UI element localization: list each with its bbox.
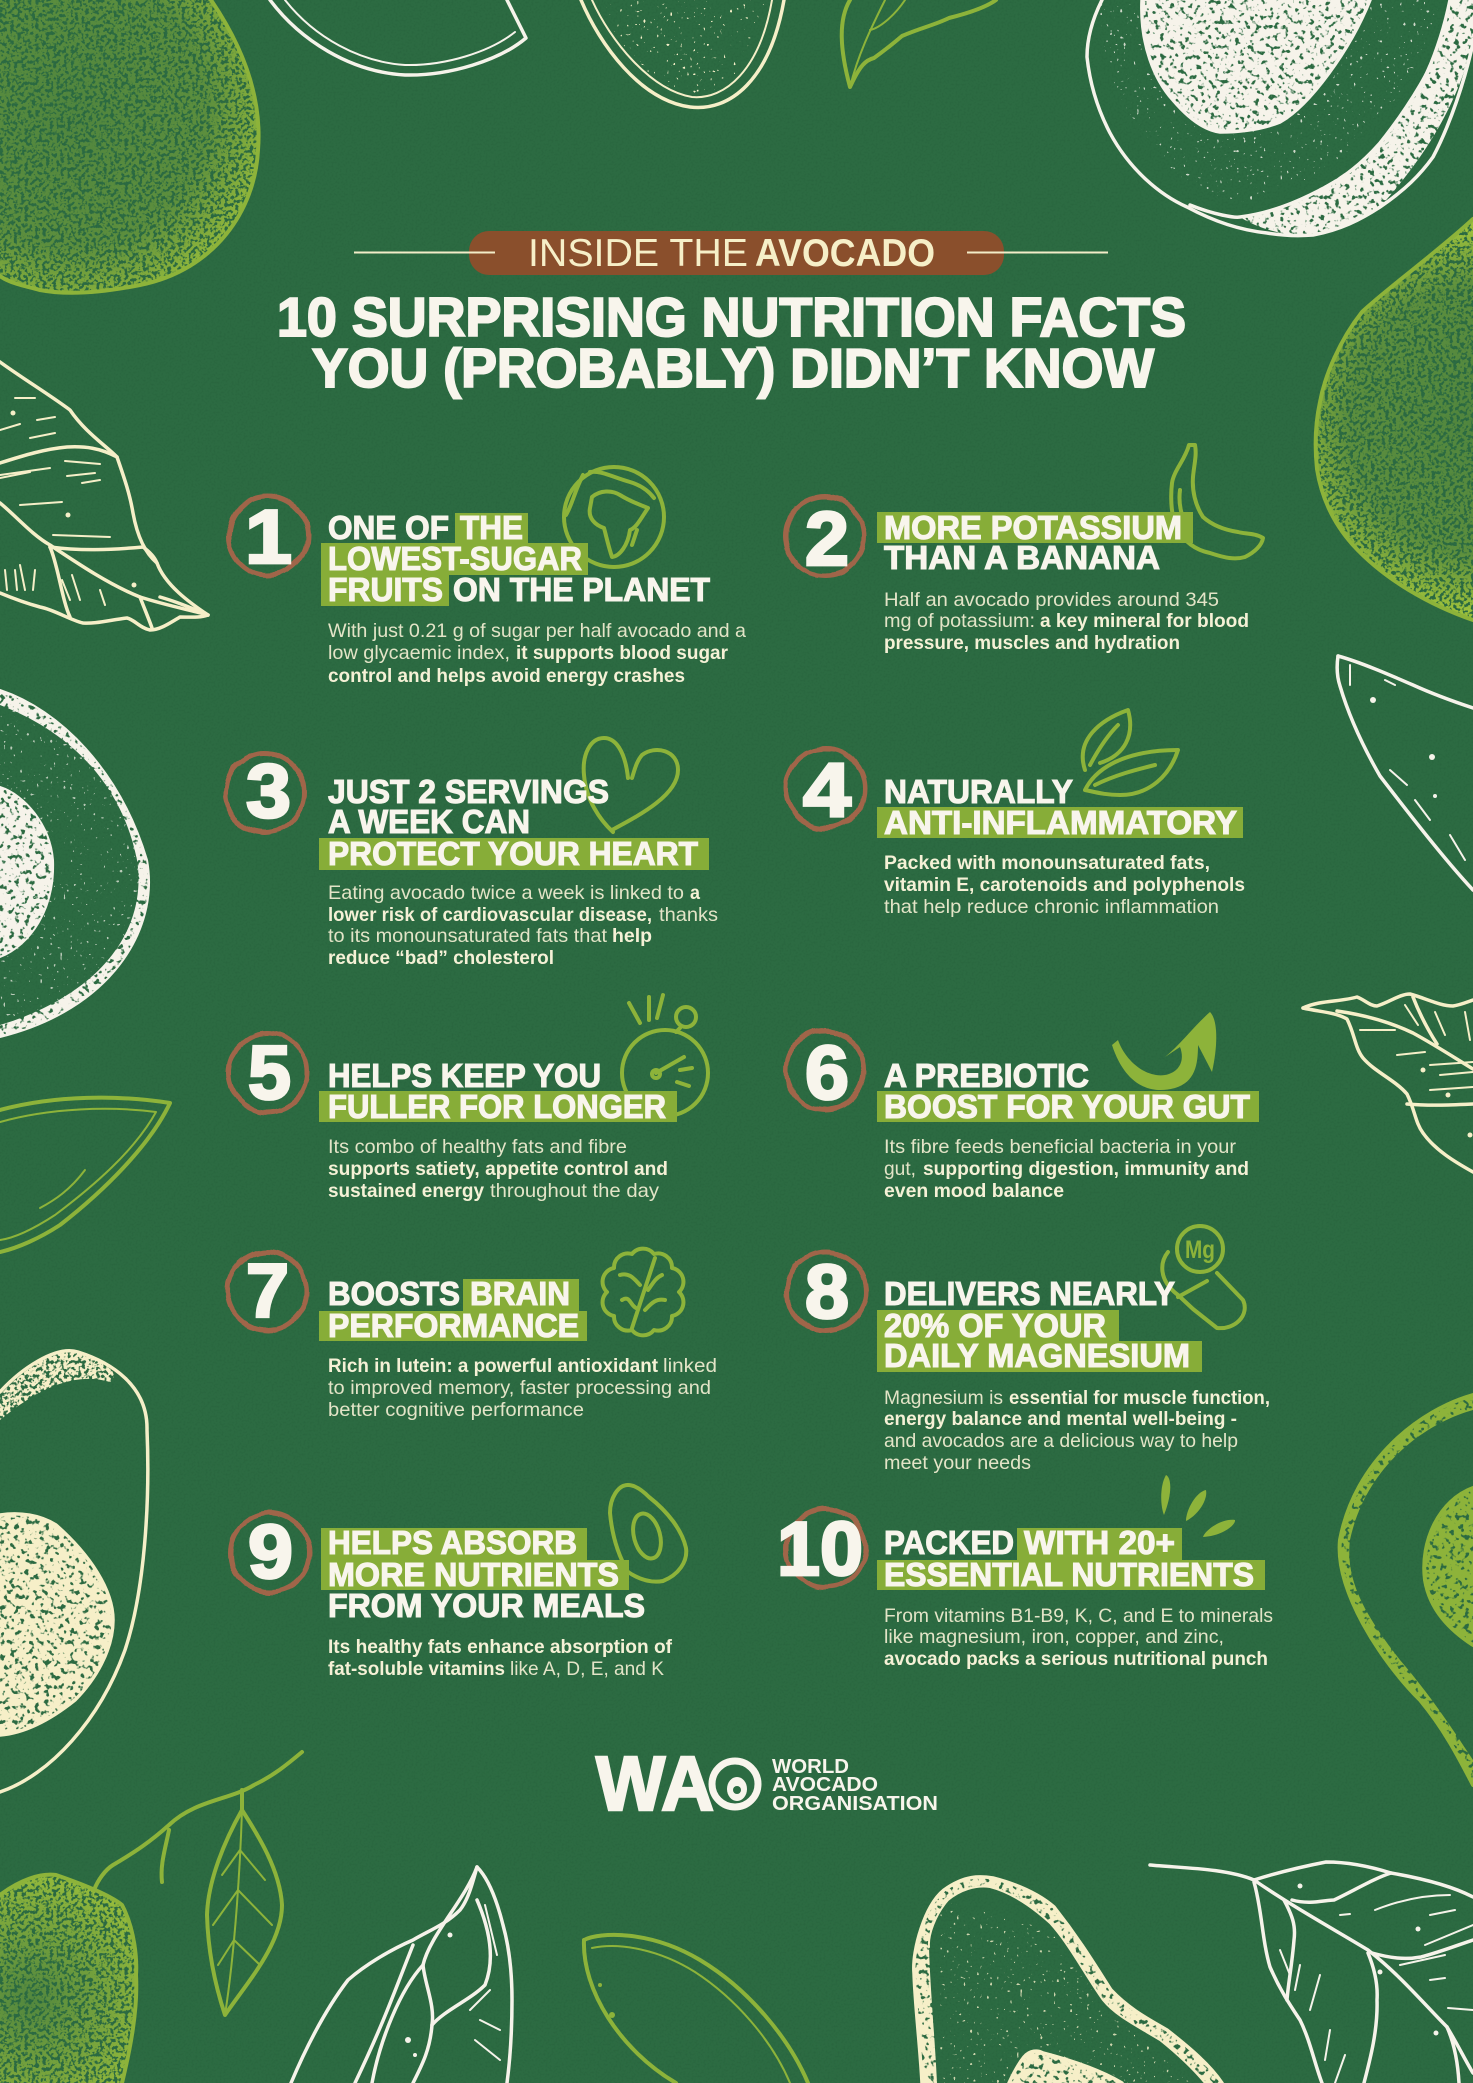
body: fact 1: low glycaemic index, [328,642,510,664]
illustration: avocado with stem bottom left [0,1752,302,2083]
number 10 badge: 10 [777,1507,863,1592]
header: eyebrow pill [354,231,1108,275]
body: fact 4: vitamin E, carotenoids and polyphenols [884,874,1245,896]
heading: fact 5: FULLER FOR LONGER [328,1088,666,1125]
panel: fact 1 [228,467,746,687]
heading: fact 6: A PREBIOTIC [884,1057,1089,1094]
heading: fact 9: HELPS ABSORB [328,1524,577,1561]
illustration: whole avocado top left [0,0,259,293]
illustration: leaf left [0,362,208,630]
number 2 badge: 2 [805,497,849,582]
heading: fact 3: JUST 2 SERVINGS [328,773,609,810]
heading: fact 2: MORE POTASSIUM [884,509,1182,546]
header: eyebrow pill: AVOCADO [755,232,935,275]
illustration: avocado half bottom right [914,1877,1222,2083]
body: fact 3: thanks [659,904,718,926]
icon: arrow [1112,1012,1216,1090]
body: fact 2: mg of potassium: [884,610,1035,632]
heading: fact 8 [877,1275,1202,1374]
icon: avocado [610,1485,686,1582]
illustration: leaf right [1303,994,1473,1172]
body: fact 5: Its combo of healthy fats and fibre [328,1136,627,1158]
heading: fact 9: FROM YOUR MEALS [328,1587,645,1624]
body: fact 8 [884,1387,1270,1474]
illustration: avocado slice right [1337,656,1473,890]
body: fact 5: sustained energy [328,1180,484,1202]
body: fact 7: better cognitive performance [328,1399,584,1421]
body: fact 7: to improved memory, faster processing and [328,1377,711,1399]
body: fact 3: Eating avocado twice a week is linked to [328,882,684,904]
panel: fact 4 [786,710,1245,918]
body: fact 9: Its healthy fats enhance absorption of [328,1636,672,1658]
icon: leaves [1083,710,1178,795]
logo: World Avocado Organisation: AVOCADO [772,1774,878,1796]
icon: burst [1161,1475,1235,1537]
title [277,286,1186,399]
illustration: green slice bottom [584,1935,808,2083]
heading: fact 6: BOOST FOR YOUR GUT [884,1088,1250,1125]
body: fact 8: energy balance and mental well-being - [884,1408,1237,1430]
body: fact 8: essential for muscle function, [1009,1387,1270,1409]
heading: fact 2: THAN A BANANA [884,539,1160,576]
heading: fact 1 [321,509,710,608]
heading: fact 1: THE [460,509,523,546]
body: fact 4: Packed with monounsaturated fats, [884,852,1210,874]
body: fact 7 [328,1355,717,1421]
illustration: avocado half bottom left [0,1351,148,1792]
icon: banana [1171,445,1263,558]
number 1 badge: 1 [245,495,292,580]
number 9 badge [230,1510,310,1595]
panel: fact 5 [228,995,708,1202]
illustration: white leaf bottom [291,1867,512,2083]
body: fact 5 [328,1136,668,1202]
number 8 badge: 8 [805,1250,849,1335]
body: fact 10: From vitamins B1-B9, K, C, and E to minerals [884,1605,1273,1627]
icon: magnesium capsule: Mg [1185,1236,1215,1264]
body: fact 4: that help reduce chronic inflammation [884,896,1219,918]
panel: fact 6 [786,1012,1259,1202]
illustration: avocado half top centre [581,0,784,108]
body: fact 7: Rich in lutein: a powerful antioxidant [328,1355,658,1377]
heading: fact 1: FRUITS [328,571,443,608]
panel: fact 8 [786,1226,1270,1474]
heading: fact 6 [877,1057,1259,1125]
body: fact 2: Half an avocado provides around 345 [884,589,1219,611]
body: fact 5: throughout the day [490,1180,659,1202]
heading: fact 7 [319,1275,587,1344]
illustration: avocado half top right [1087,0,1473,236]
heading: fact 5 [319,1057,677,1125]
title: YOU (PROBABLY) DIDN’T KNOW [312,337,1154,399]
icon: heart [584,738,678,832]
heading: fact 2 [877,509,1193,576]
heading: fact 4 [877,773,1243,841]
panel: fact 7 [228,1249,717,1421]
body: fact 1: With just 0.21 g of sugar per half avocado and a [328,620,746,642]
number 6 badge [786,1030,864,1116]
heading: fact 10: ESSENTIAL NUTRIENTS [884,1556,1254,1593]
icon: globe [564,467,664,567]
heading: fact 8: DAILY MAGNESIUM [884,1337,1190,1374]
body: fact 6: gut, [884,1158,916,1180]
number 3 badge: 3 [246,749,291,834]
body: fact 8: and avocados are a delicious way to help [884,1430,1238,1452]
body: fact 1 [328,620,746,687]
logo: World Avocado Organisation: ORGANISATION [772,1793,938,1815]
heading: fact 7: BRAIN [470,1275,570,1312]
body: fact 6: even mood balance [884,1180,1064,1202]
body: fact 5: supports satiety, appetite control and [328,1158,668,1180]
illustration: whole avocado right [1316,219,1473,620]
header: eyebrow pill: INSIDE THE [528,232,748,275]
illustration: avocado half right green [1340,1395,1473,1785]
illustration: white leaf bottom right [1150,1862,1473,2083]
number 8 badge [786,1250,866,1335]
heading: fact 3: A WEEK CAN [328,803,530,840]
body: fact 6: Its fibre feeds beneficial bacteria in your [884,1136,1237,1158]
number 2 badge [786,497,864,582]
panel: fact 10 [777,1475,1273,1670]
heading: fact 9: MORE NUTRIENTS [328,1556,619,1593]
logo: World Avocado Organisation [596,1741,938,1827]
body: fact 2 [884,589,1249,654]
heading: fact 5: HELPS KEEP YOU [328,1057,601,1094]
body: fact 9: fat-soluble vitamins [328,1658,505,1680]
heading: fact 1: ON THE PLANET [453,571,710,608]
body: fact 7: linked [663,1355,717,1377]
body: fact 4 [884,852,1245,918]
body: fact 6 [884,1136,1249,1202]
number 9 badge: 9 [248,1510,293,1595]
icon: magnesium capsule [1162,1226,1245,1328]
illustration: avocado slice left [0,1098,170,1252]
title: 10 SURPRISING NUTRITION FACTS [277,286,1186,348]
heading: fact 8: 20% OF YOUR [884,1307,1106,1344]
heading: fact 3 [319,773,709,872]
body: fact 3: lower risk of cardiovascular disease, [328,904,652,926]
number 6 badge: 6 [805,1031,849,1116]
panel: fact 9 [230,1485,686,1680]
body: fact 6: supporting digestion, immunity and [923,1158,1249,1180]
heading: fact 10: PACKED [884,1524,1014,1561]
body: fact 3: a [690,882,700,904]
panel: fact 3 [226,738,718,969]
body: fact 3: to its monounsaturated fats that [328,925,608,947]
body: fact 9 [328,1636,672,1680]
illustration: avocado half left [0,690,149,1037]
logo: World Avocado Organisation: WA [596,1741,714,1827]
number 7 badge [228,1249,306,1334]
heading: fact 1: ONE OF [328,509,449,546]
number 7 badge: 7 [246,1249,289,1334]
number 4 badge: 4 [803,748,851,833]
number 1 badge [228,495,308,580]
body: fact 8: Magnesium is [884,1387,1003,1409]
number 5 badge: 5 [248,1031,291,1116]
heading: fact 4: ANTI-INFLAMMATORY [884,804,1237,841]
number 4 badge [786,748,864,833]
number 3 badge [226,749,304,834]
logo: World Avocado Organisation: WORLD [772,1756,849,1778]
illustration: green leaf top centre [842,0,996,87]
illustration: avocado slice top [270,0,526,75]
body: fact 2: pressure, muscles and hydration [884,632,1180,654]
heading: fact 1: LOWEST-SUGAR [328,540,582,577]
icon: stopwatch [622,995,708,1116]
body: fact 1: it supports blood sugar [516,642,728,664]
body: fact 2: a key mineral for blood [1040,610,1249,632]
body: fact 10: avocado packs a serious nutritional punch [884,1648,1268,1670]
body: fact 10: like magnesium, iron, copper, and zinc, [884,1626,1224,1648]
heading: fact 9 [321,1524,645,1624]
body: fact 9: like A, D, E, and K [510,1658,664,1680]
heading: fact 7: BOOSTS [328,1275,460,1312]
panel: fact 2 [786,445,1263,654]
body: fact 3: help [612,925,652,947]
body: fact 3 [328,882,718,969]
heading: fact 4: NATURALLY [884,773,1073,810]
body: fact 8: meet your needs [884,1452,1031,1474]
heading: fact 3: PROTECT YOUR HEART [328,835,698,872]
heading: fact 10: WITH 20+ [1024,1524,1175,1561]
heading: fact 10 [877,1524,1265,1593]
heading: fact 7: PERFORMANCE [328,1307,579,1344]
heading: fact 8: DELIVERS NEARLY [884,1275,1175,1312]
icon: brain [603,1249,683,1335]
body: fact 10 [884,1605,1273,1670]
body: fact 1: control and helps avoid energy crashes [328,665,685,687]
number 5 badge [228,1031,308,1116]
body: fact 3: reduce “bad” cholesterol [328,947,554,969]
